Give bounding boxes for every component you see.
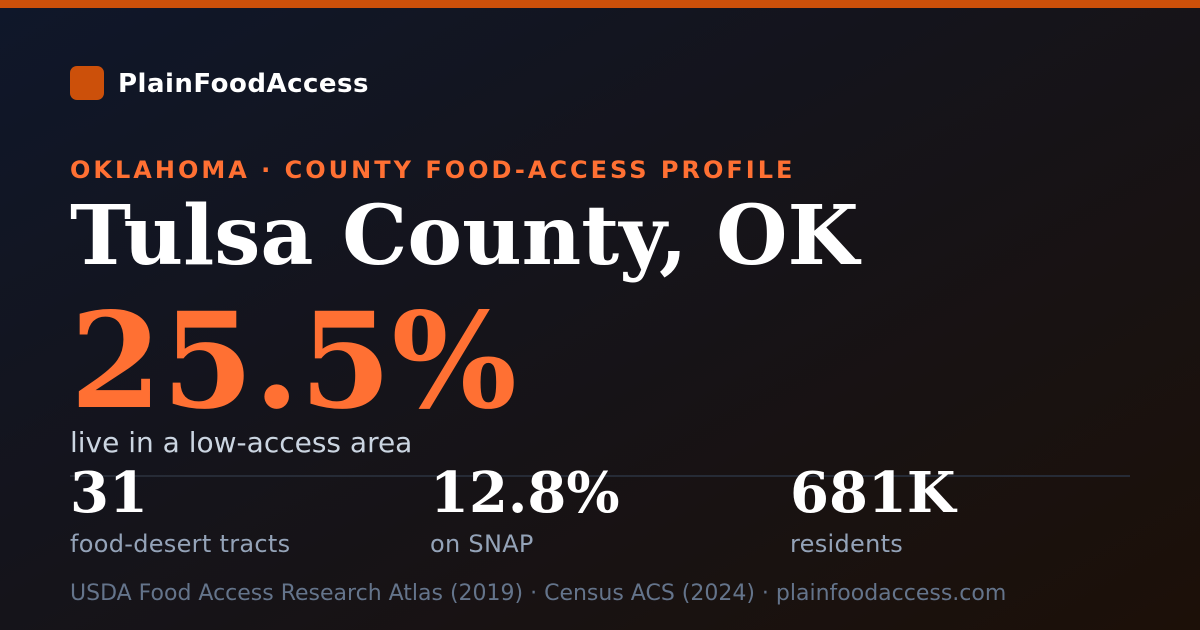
stat label: on SNAP bbox=[430, 530, 534, 558]
divider bbox=[70, 475, 1130, 477]
stat label: residents bbox=[790, 530, 903, 558]
stat: food-desert tracts bbox=[70, 460, 290, 558]
title: Tulsa County, OK bbox=[70, 188, 859, 284]
stat: residents bbox=[790, 460, 958, 558]
source footer: USDA Food Access Research Atlas (2019) · Census ACS (2024) · plainfoodaccess.com bbox=[70, 581, 1006, 606]
headline caption: live in a low-access area bbox=[70, 426, 412, 459]
stat value: 12.8% bbox=[430, 460, 620, 526]
stat label: food-desert tracts bbox=[70, 530, 290, 558]
brand name: PlainFoodAccess bbox=[118, 69, 369, 99]
headline percentage: 25.5% bbox=[70, 284, 517, 439]
stat value: 681K bbox=[790, 460, 956, 526]
stat: on SNAP bbox=[430, 460, 620, 558]
brand logo mark bbox=[70, 66, 104, 100]
eyebrow heading: OKLAHOMA · COUNTY FOOD-ACCESS PROFILE bbox=[70, 156, 795, 184]
stat value: 31 bbox=[70, 460, 148, 526]
top accent bar bbox=[0, 0, 1200, 8]
